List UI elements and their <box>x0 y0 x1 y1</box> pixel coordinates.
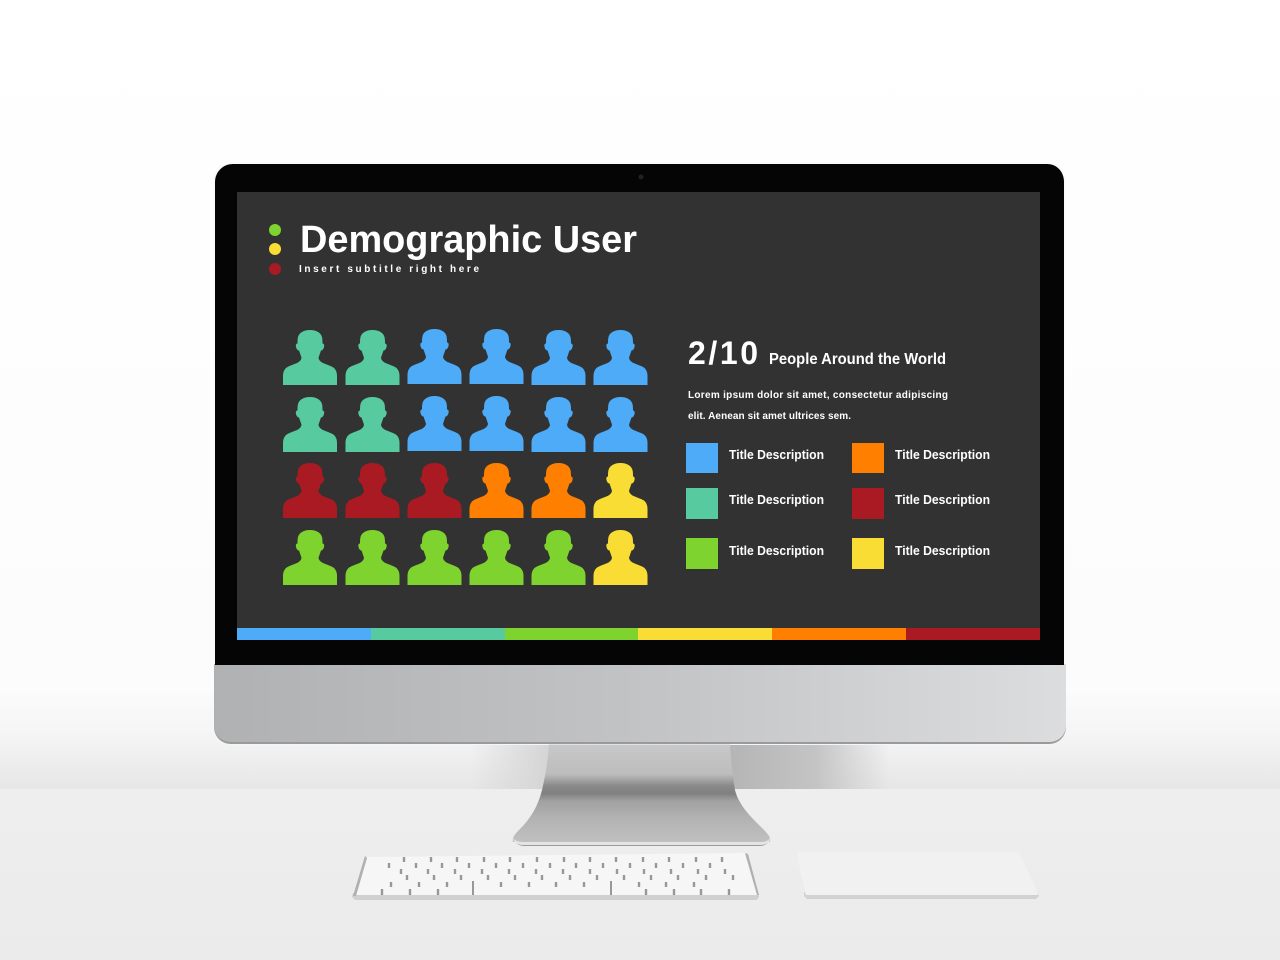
icon: person blue <box>408 396 462 451</box>
keyboard <box>352 853 759 900</box>
description text: elit. Aenean sit amet ultrices sem. <box>688 411 851 422</box>
subtitle: Insert subtitle right here <box>299 264 479 275</box>
icon: person teal <box>283 397 337 452</box>
icon: person teal <box>346 397 400 452</box>
icon: person blue <box>532 397 586 452</box>
icon: person yellow <box>594 463 648 518</box>
icon: person green <box>283 530 337 585</box>
monitor chin <box>214 664 1066 743</box>
statistic heading: 2/10 <box>688 335 758 371</box>
icon: person teal <box>346 330 400 385</box>
legend <box>686 443 990 569</box>
legend item: red <box>852 488 990 519</box>
legend item: orange: Title Description <box>895 448 990 462</box>
icon: person teal <box>283 330 337 385</box>
legend item: teal: Title Description <box>729 493 824 507</box>
icon: person blue <box>408 329 462 384</box>
icon: person green <box>470 530 524 585</box>
title: Demographic User <box>300 219 637 261</box>
icon: person blue <box>470 329 524 384</box>
people chart <box>283 329 648 585</box>
icon: person blue <box>594 397 648 452</box>
legend item: orange <box>852 443 990 473</box>
monitor <box>214 162 1066 744</box>
row 4 of people <box>283 530 648 585</box>
legend item: yellow <box>852 538 990 569</box>
icon: person red <box>283 463 337 518</box>
webcam <box>638 174 644 180</box>
legend item: blue <box>686 443 824 473</box>
trackpad <box>797 852 1039 899</box>
row 2 of people <box>283 396 648 452</box>
screen panel <box>237 192 1040 640</box>
icon: person green <box>408 530 462 585</box>
decorative dots <box>269 224 281 275</box>
monitor bezel <box>215 164 1064 665</box>
legend item: yellow: Title Description <box>895 544 990 558</box>
statistic heading <box>688 335 946 371</box>
row 1 of people <box>283 329 648 385</box>
icon: person red <box>346 463 400 518</box>
legend item: green: Title Description <box>729 544 824 558</box>
icon: person green <box>346 530 400 585</box>
description text: Lorem ipsum dolor sit amet, consectetur adipiscing <box>688 390 948 401</box>
icon: person orange <box>532 463 586 518</box>
icon: person green <box>532 530 586 585</box>
row 3 of people <box>283 463 648 518</box>
monitor stand <box>513 744 770 846</box>
legend item: green <box>686 538 824 569</box>
legend item: teal <box>686 488 824 519</box>
description text <box>688 390 948 422</box>
icon: person orange <box>470 463 524 518</box>
colour strip <box>237 628 1040 640</box>
statistic heading: People Around the World <box>769 351 946 368</box>
icon: person yellow <box>594 530 648 585</box>
icon: person blue <box>470 396 524 451</box>
icon: person blue <box>532 330 586 385</box>
icon: person red <box>408 463 462 518</box>
legend item: blue: Title Description <box>729 448 824 462</box>
legend item: red: Title Description <box>895 493 990 507</box>
icon: person blue <box>594 330 648 385</box>
